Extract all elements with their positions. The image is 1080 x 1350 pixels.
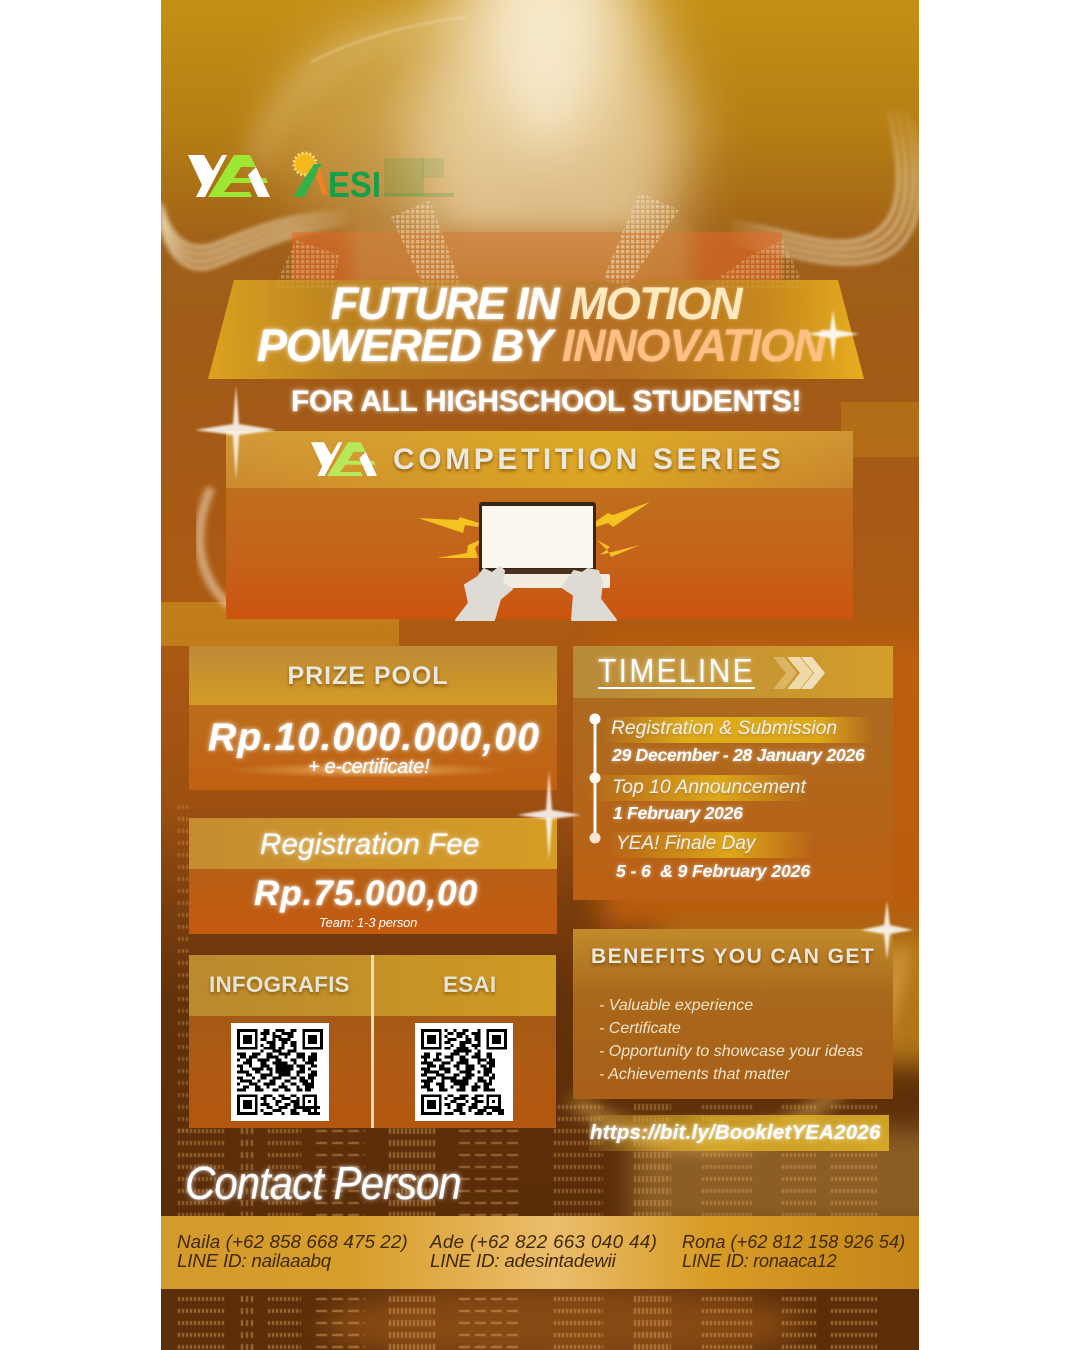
logo: AESI (292, 152, 454, 200)
QR header band (189, 955, 556, 1016)
competition series header band (226, 431, 853, 488)
contact: Naila: Naila (+62 858 668 475 22) (177, 1231, 408, 1252)
prize amount: Rp.10.000.000,00 (208, 716, 540, 759)
panel: timeline: 5 - 6 & 9 February 2026 (616, 861, 810, 881)
timeline item 1 (603, 717, 873, 743)
timeline item 2: Top 10 Announcement (612, 776, 806, 798)
timeline header: TIMELINE (598, 652, 755, 689)
label: infografis: INFOGRAFIS (209, 972, 350, 997)
competition series heading: COMPETITION SERIES (393, 443, 785, 476)
contact: Naila (177, 1231, 408, 1271)
icon: chevrons (773, 657, 825, 689)
panel: competition series (226, 431, 853, 619)
benefits list: - Opportunity to showcase your ideas (599, 1043, 863, 1060)
logo: YEA (188, 155, 270, 197)
contact: Rona: Rona (+62 812 158 926 54) (682, 1232, 905, 1252)
contact: Ade (429, 1231, 657, 1271)
illustration: laptop and hands (418, 502, 650, 621)
headline text: POWERED BY INNOVATION (257, 320, 825, 371)
logos (188, 152, 454, 200)
timeline item 1: Registration & Submission (611, 718, 837, 739)
contact: Naila: LINE ID: nailaaabq (177, 1250, 331, 1271)
divider line (371, 955, 374, 1128)
contact: Ade: LINE ID: adesintadewii (430, 1250, 616, 1271)
headline text (254, 278, 828, 371)
prize pool header (189, 646, 557, 705)
benefits heading: BENEFITS YOU CAN GET (591, 945, 875, 968)
poster background (161, 0, 919, 1350)
e-certificate note: + e-certificate! (308, 756, 429, 778)
QR code: infografis (231, 1023, 329, 1121)
team size note: Team: 1-3 person (319, 915, 417, 930)
booklet link: https://bit.ly/BookletYEA2026 (590, 1121, 881, 1144)
registration fee header: Registration Fee (260, 828, 480, 861)
panel: timeline: 29 December - 28 January 2026 (612, 745, 864, 765)
benefits list (599, 997, 863, 1083)
benefits list: - Achievements that matter (599, 1066, 790, 1083)
contact person heading: Contact Person (185, 1157, 461, 1209)
panel: timeline: 1 February 2026 (613, 803, 742, 823)
QR code: esai (415, 1023, 513, 1121)
benefits list: - Certificate (599, 1020, 681, 1037)
panel: timeline (573, 646, 893, 900)
benefits list: - Valuable experience (599, 997, 753, 1014)
panel: benefits (573, 929, 893, 1099)
panel: contact strip (161, 1216, 919, 1289)
label: esai: ESAI (443, 972, 496, 997)
sparkles (195, 310, 913, 960)
timeline item 3: YEA! Finale Day (616, 833, 755, 854)
icon: YEA logo small (311, 442, 377, 476)
prize pool header: PRIZE POOL (288, 662, 448, 690)
headline text: FUTURE IN MOTION (331, 278, 741, 329)
registration fee header (189, 818, 557, 869)
panel: registration fee (189, 818, 557, 934)
headline banner (208, 278, 864, 379)
panel: prize pool (189, 646, 557, 790)
timeline header (573, 646, 893, 698)
contact: Ade: Ade (+62 822 663 040 44) (430, 1231, 657, 1252)
timeline item 3 (608, 832, 813, 858)
timeline line (590, 714, 600, 844)
contact: Rona: LINE ID: ronaaca12 (682, 1251, 836, 1271)
panel: QR codes (189, 955, 556, 1128)
fee amount: Rp.75.000,00 (254, 874, 478, 913)
booklet link (589, 1115, 889, 1151)
subtitle: FOR ALL HIGHSCHOOL STUDENTS! (291, 385, 801, 418)
contact: Rona (682, 1232, 905, 1271)
